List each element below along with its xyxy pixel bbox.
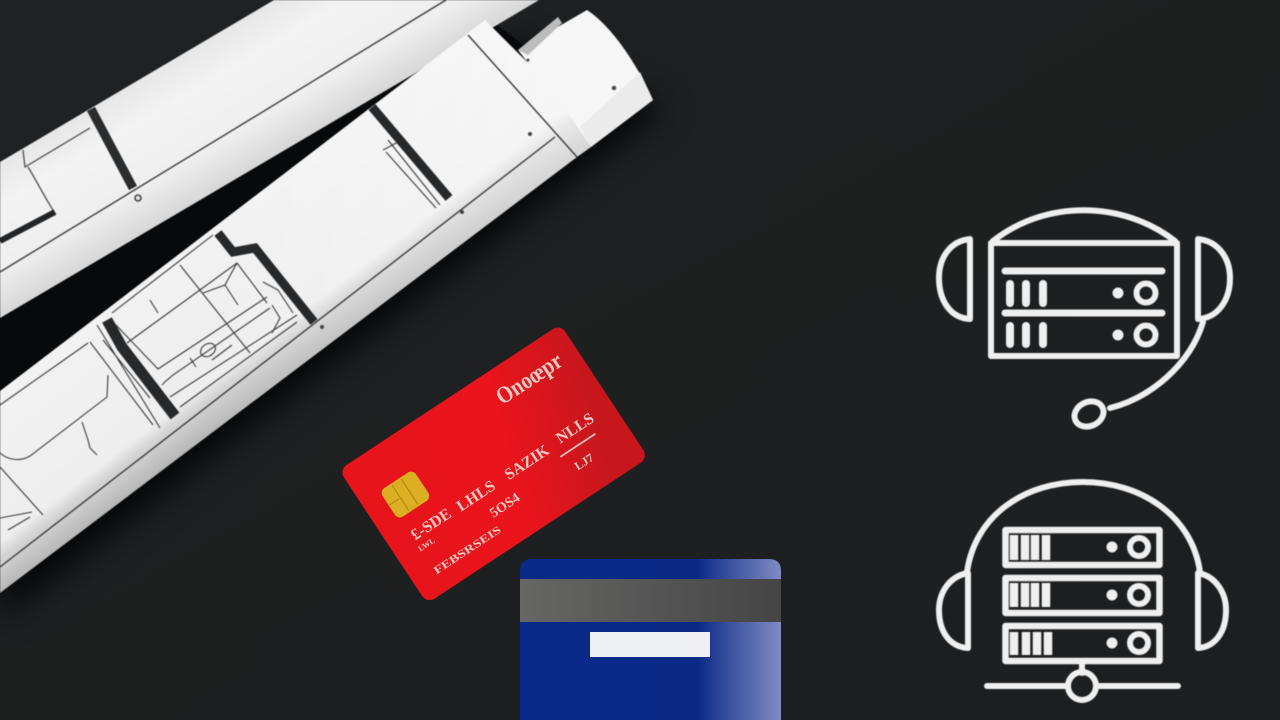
card detail text: LJ7	[572, 450, 596, 473]
thick stepped band middle	[218, 233, 314, 322]
dark gap between rolls	[0, 25, 530, 395]
roll highlight towards the end	[0, 20, 591, 593]
thick band right	[372, 107, 449, 198]
lower blueprint roll	[0, 10, 653, 593]
card number: NLLS	[553, 410, 597, 447]
card number: SAZIK	[502, 442, 553, 484]
thick black band	[91, 109, 133, 188]
status lights	[1112, 284, 1156, 344]
inner sheet lower shade	[580, 72, 653, 147]
vent bars	[1010, 284, 1043, 344]
headband	[967, 482, 1200, 572]
drawing details	[0, 140, 440, 530]
card brand: Onoœpr	[491, 348, 568, 410]
roll body	[0, 20, 591, 593]
upper blueprint roll	[0, 0, 539, 318]
left ear cup	[939, 573, 968, 648]
small markers	[320, 58, 616, 329]
red credit card	[339, 324, 648, 604]
roll edge line	[0, 0, 446, 272]
card number: £-SDE	[408, 505, 455, 544]
network connector	[987, 664, 1178, 700]
card detail text: LWL	[417, 536, 437, 553]
vent bars	[1014, 535, 1048, 655]
right ear cup	[1198, 573, 1226, 648]
microphone	[1070, 397, 1108, 431]
magnetic stripe	[520, 579, 781, 622]
grey paper sliver	[518, 17, 562, 55]
thick stepped band left	[107, 320, 175, 416]
roll edge lines	[0, 35, 577, 567]
headband	[993, 210, 1175, 241]
microphone boom	[1110, 322, 1203, 408]
lower left band	[0, 212, 55, 241]
icon: server with headset microphone	[939, 210, 1230, 431]
small marker	[135, 195, 141, 201]
shelf lines	[1005, 271, 1162, 313]
card detail text: FEBSRSEIS	[432, 524, 503, 577]
right ear cup	[1198, 239, 1230, 319]
sketch lines	[23, 128, 90, 210]
signature box	[590, 632, 710, 657]
left ear cup	[939, 239, 970, 319]
card detail text: 5OS4	[487, 491, 523, 521]
card number	[408, 410, 599, 545]
server units	[1006, 530, 1160, 661]
card number: LHLS	[454, 477, 499, 515]
roll shadows	[0, 40, 664, 618]
blue card back	[520, 559, 781, 720]
card detail text	[417, 430, 614, 578]
server cabinet	[991, 243, 1177, 356]
icon: server rack with headphones	[939, 482, 1226, 700]
status lights	[1106, 538, 1148, 652]
rolled inner sheet end	[518, 10, 653, 147]
chip	[379, 469, 431, 520]
